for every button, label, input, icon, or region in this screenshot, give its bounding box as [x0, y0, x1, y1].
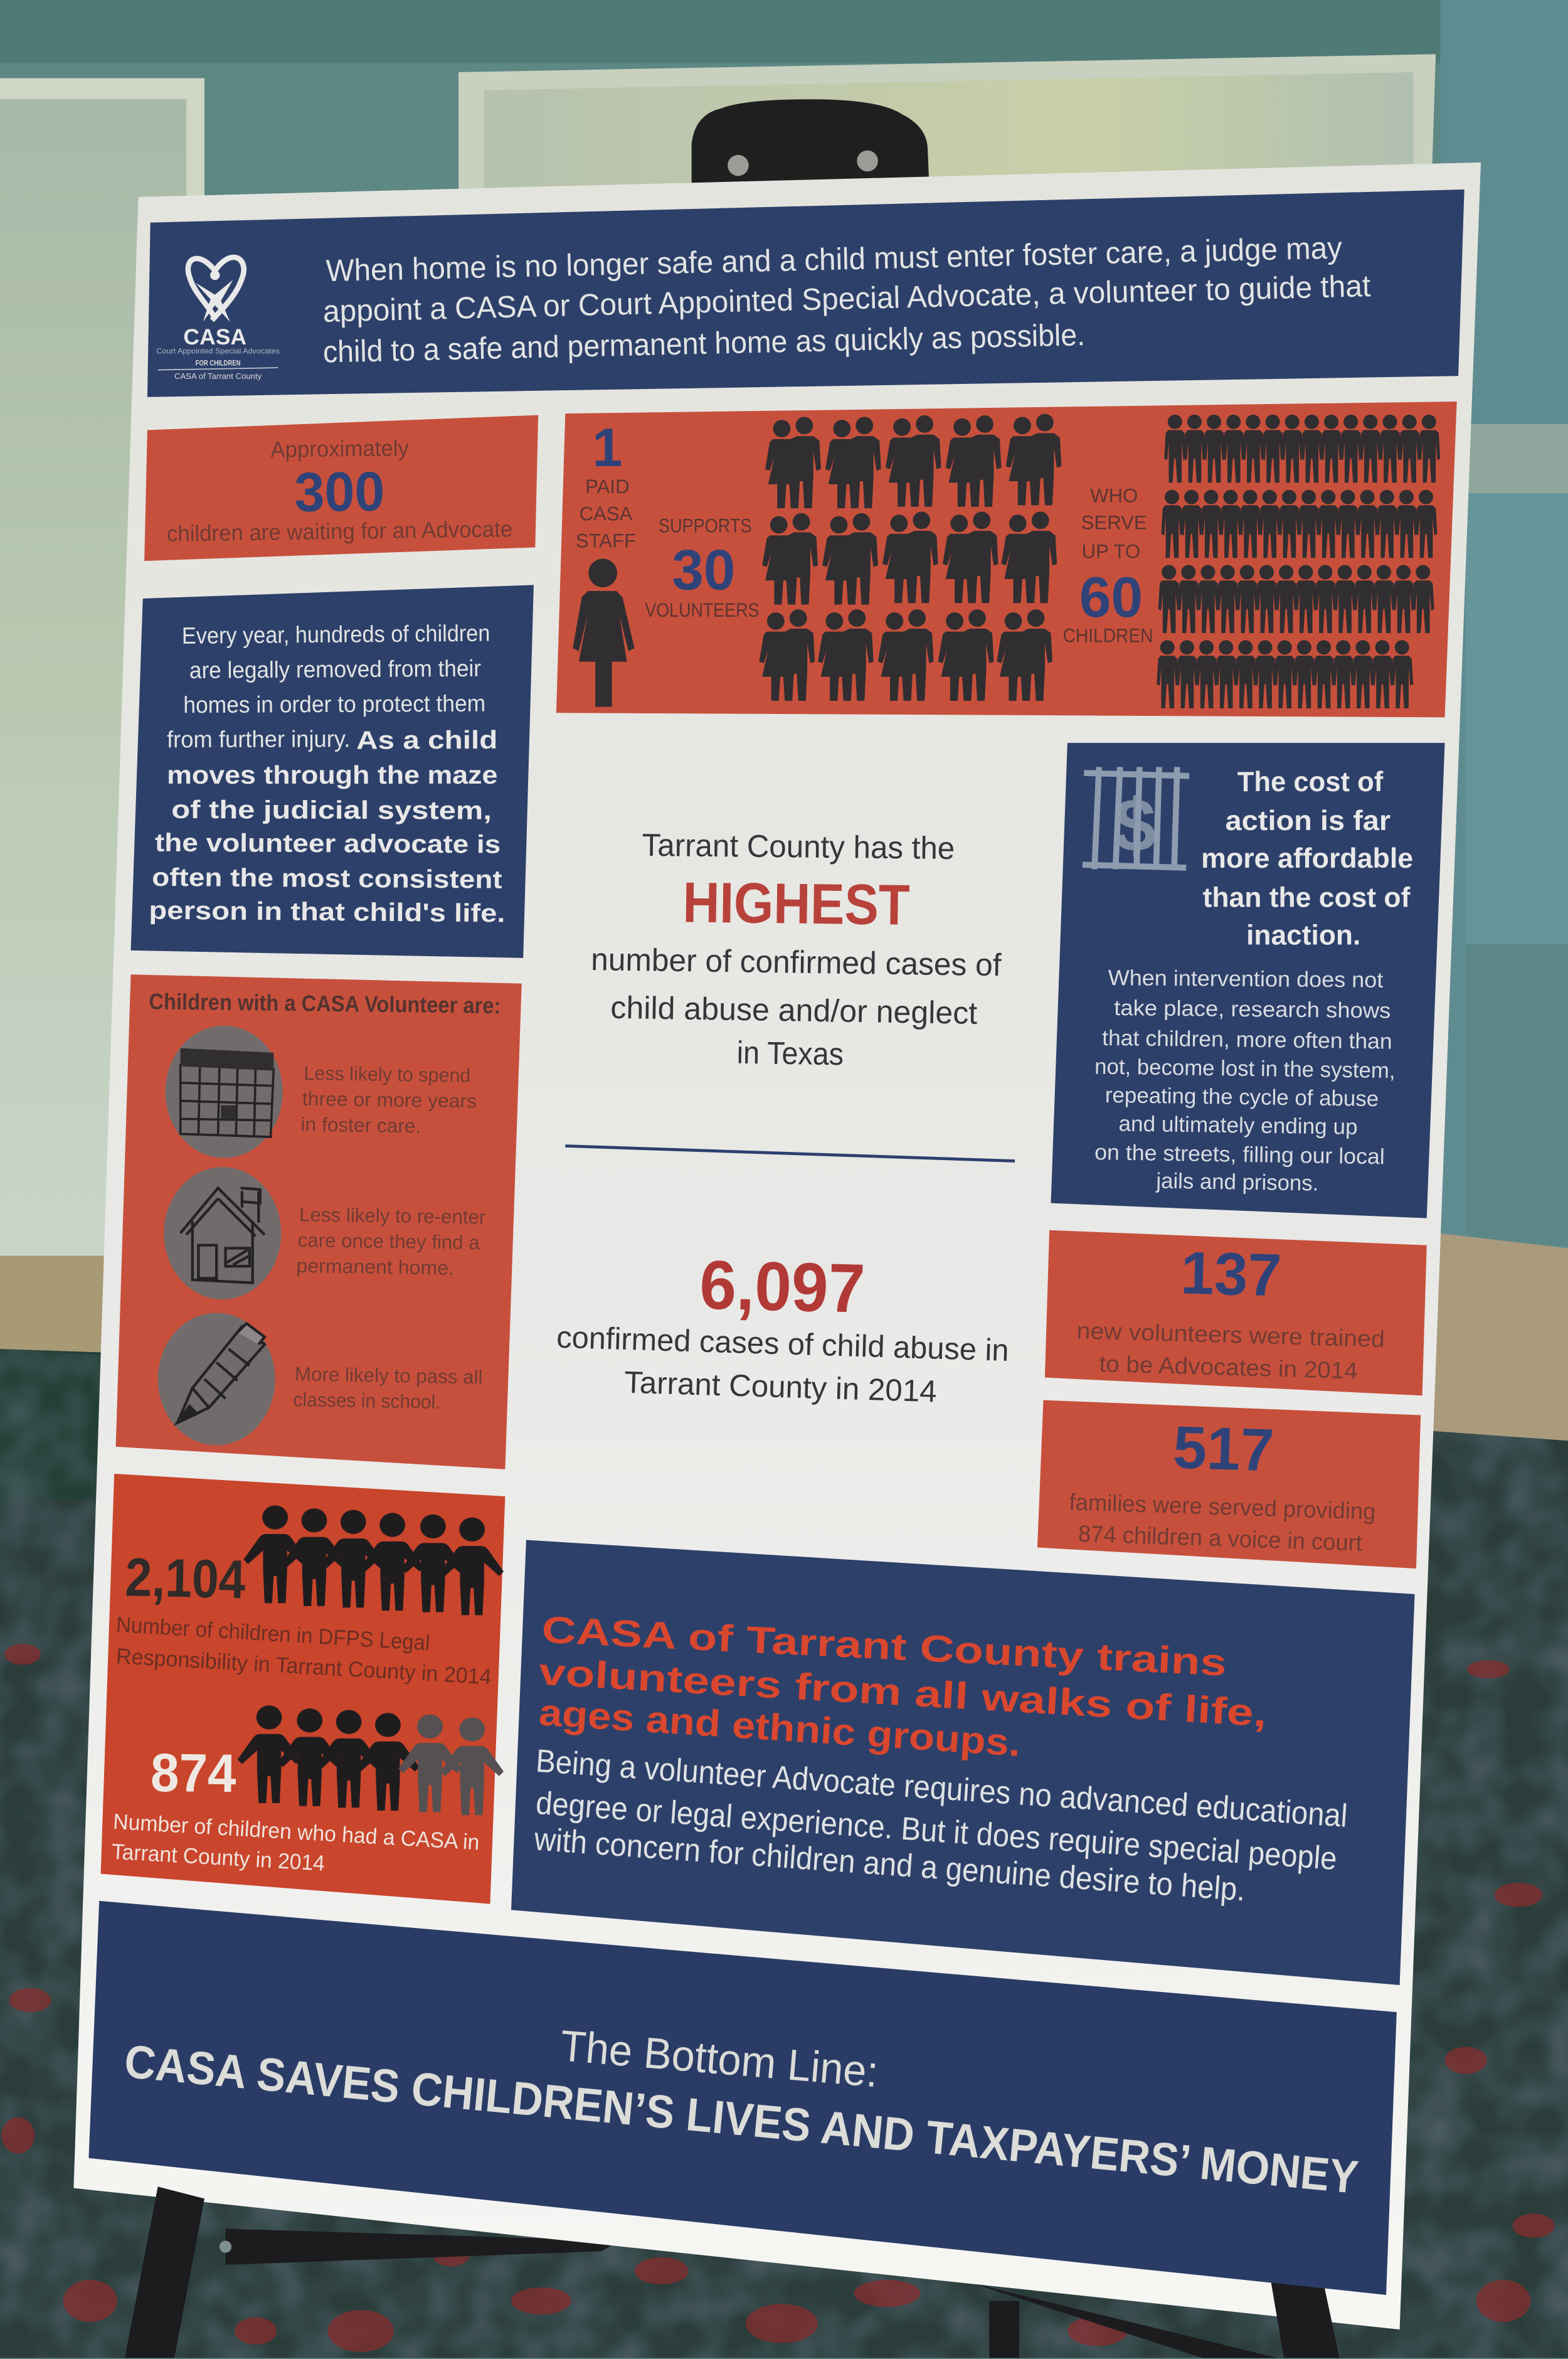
panel: 300 children waiting: children are waiting for an Advocate	[167, 516, 512, 546]
cost body text: that children, more often than	[1102, 1026, 1392, 1054]
text: CASA description: Number of children who had a CASA in	[112, 1810, 480, 1855]
text: CASA description	[111, 1810, 480, 1876]
cost body text: not, become lost in the system,	[1094, 1055, 1396, 1083]
stat: 6,097 confirmed cases	[556, 1246, 1009, 1408]
bottom line text: The Bottom Line:	[558, 2021, 880, 2096]
stat: 1 paid staff: PAID	[585, 476, 630, 498]
handwritten text block: the volunteer advocate is	[155, 828, 501, 859]
plain text block	[167, 620, 490, 752]
headline: highest in Texas: Tarrant County has the	[642, 827, 955, 866]
icon: calendar	[166, 1026, 283, 1158]
text: more likely pass: classes in school.	[293, 1388, 441, 1413]
icons: children	[1157, 415, 1440, 708]
panel: 517 families: families were served providing	[1069, 1489, 1376, 1525]
panel: every year	[131, 585, 534, 958]
icon: dollar behind bars: $	[1114, 784, 1156, 868]
panel: the bottom line	[88, 1901, 1397, 2295]
handwritten heading: CASA of Tarrant County trains	[541, 1609, 1227, 1684]
headline: highest in Texas: child abuse and/or neglect	[610, 989, 978, 1031]
cost body text: and ultimately ending up	[1118, 1112, 1358, 1139]
stat: 6,097 confirmed cases: 6,097	[699, 1246, 866, 1328]
headline: highest in Texas: HIGHEST	[682, 871, 910, 937]
plain text block: are legally removed from their	[189, 655, 481, 683]
cost heading: action is far	[1226, 806, 1391, 836]
bottom line statement: CASA SAVES CHILDREN’S LIVES AND TAXPAYERS’ MONEY	[122, 2035, 1360, 2203]
stat: 60 children: WHO	[1090, 485, 1138, 507]
icon: house	[164, 1167, 281, 1299]
handwritten text block: person in that child's life.	[149, 896, 506, 928]
text: CASA description: Tarrant County in 2014	[111, 1840, 326, 1876]
cost body text: repeating the cycle of abuse	[1105, 1084, 1379, 1111]
stat: 30 volunteers: 30	[672, 539, 735, 602]
panel: 517 families: 874 children a voice in court	[1078, 1520, 1363, 1556]
text: less likely foster: in foster care.	[300, 1114, 421, 1137]
cost heading: than the cost of	[1203, 882, 1411, 913]
stat: 60 children: 60	[1079, 566, 1143, 629]
icon row: four of six children highlighted	[238, 1705, 504, 1815]
logo: CASA: CASA	[183, 326, 246, 349]
handwritten heading: ages and ethnic groups.	[538, 1691, 1022, 1764]
stat: 874: 874	[151, 1743, 236, 1804]
stat: 1 paid staff: STAFF	[576, 530, 636, 552]
text: DFPS description: Responsibility in Tarrant County in 2014	[115, 1644, 492, 1690]
stat: 60 children: UP TO	[1082, 540, 1140, 562]
panel: 137 new volunteers: 137	[1180, 1239, 1282, 1309]
stat: 60 children: SERVE	[1081, 512, 1147, 534]
headline: highest in Texas: number of confirmed cases of	[591, 941, 1002, 982]
handwritten text block: moves through the maze	[167, 760, 497, 789]
panel: 137 new volunteers	[1045, 1230, 1427, 1395]
cost body text	[1094, 966, 1396, 1196]
stat: 1 paid staff: CASA	[580, 503, 633, 525]
panel: intro header	[147, 189, 1465, 397]
plain text block: Every year, hundreds of children	[182, 620, 490, 649]
stat: 60 children: CHILDREN	[1063, 625, 1153, 647]
cost heading: inaction.	[1246, 920, 1360, 951]
stat: 6,097 confirmed cases: confirmed cases of child abuse in	[556, 1321, 1009, 1368]
intro text	[322, 231, 1371, 370]
cost body text: take place, research shows	[1114, 996, 1391, 1023]
stat: 2,104: 2,104	[125, 1547, 246, 1610]
icons: volunteers	[759, 414, 1061, 701]
handwritten text block: often the most consistent	[152, 863, 502, 894]
cost body text: on the streets, filling our local	[1094, 1141, 1385, 1169]
body text: with concern for children and a genuine desire to help.	[532, 1820, 1247, 1908]
panel: 137 new volunteers: new volunteers were trained	[1076, 1317, 1385, 1352]
text: less likely foster	[300, 1062, 477, 1137]
plain text block: homes in order to protect them	[183, 690, 485, 718]
logo: CASA	[156, 257, 280, 381]
cost heading: The cost of	[1237, 767, 1383, 797]
logo: CASA: FOR CHILDREN	[196, 359, 241, 367]
icon: staff person	[573, 558, 635, 707]
panel: CASA trains volunteers	[511, 1540, 1415, 1985]
intro text: When home is no longer safe and a child must enter foster care, a judge may	[326, 231, 1343, 288]
cost body text: jails and prisons.	[1155, 1169, 1319, 1196]
text: more likely pass: More likely to pass all	[295, 1363, 483, 1388]
body text	[532, 1742, 1348, 1908]
easel top clamp	[692, 99, 929, 188]
easel front legs	[125, 2186, 1340, 2358]
stat: 6,097 confirmed cases: Tarrant County in 2014	[623, 1366, 937, 1408]
easel rear braces	[226, 2229, 1278, 2358]
plain text block: from further injury.	[167, 725, 351, 752]
panel: 300 children waiting: 300	[294, 460, 385, 523]
logo: CASA: CASA of Tarrant County	[174, 371, 262, 381]
stat: 30 volunteers	[645, 515, 759, 621]
intro text: appoint a CASA or Court Appointed Special Advocate, a volunteer to guide that	[322, 269, 1371, 329]
stat: 1 paid staff: 1	[592, 418, 622, 478]
cost heading	[1201, 767, 1413, 951]
text: less likely re-enter	[296, 1203, 486, 1279]
panel: 517 families: 517	[1172, 1414, 1275, 1484]
panel: 137 new volunteers: to be Advocates in 2014	[1099, 1350, 1358, 1384]
text: DFPS description	[115, 1613, 492, 1690]
icon: dollar behind bars	[1083, 767, 1189, 869]
handwritten text block	[149, 725, 506, 928]
intro text: child to a safe and permanent home as quickly as possible.	[322, 318, 1086, 370]
handwritten heading	[538, 1609, 1268, 1764]
stat: 30 volunteers: VOLUNTEERS	[645, 599, 759, 621]
panel: children with a CASA volunteer	[116, 974, 522, 1469]
panel: cost of action	[1051, 743, 1445, 1218]
text: DFPS description: Number of children in DFPS Legal	[115, 1613, 430, 1655]
body text: degree or legal experience. But it does require special people	[535, 1784, 1338, 1877]
panel: 300 children waiting: Approximately	[270, 435, 409, 462]
panel: staff to volunteers to children ratio	[556, 402, 1457, 717]
stat: 60 children	[1063, 485, 1153, 647]
handwritten text block: of the judicial system,	[171, 795, 492, 825]
headline: highest in Texas: in Texas	[736, 1035, 844, 1072]
stat: 1 paid staff	[576, 418, 636, 552]
text: less likely foster: three or more years	[302, 1088, 477, 1112]
text: less likely re-enter: care once they find a	[298, 1229, 480, 1254]
handwritten text block: As a child	[356, 725, 497, 755]
text: more likely pass	[293, 1363, 483, 1413]
panel: 517 families	[1037, 1400, 1421, 1568]
cost heading: more affordable	[1201, 843, 1413, 874]
logo: CASA: Court Appointed Special Advocates	[156, 346, 280, 355]
icon row: six children	[243, 1505, 504, 1615]
stat: 30 volunteers: SUPPORTS	[659, 515, 751, 537]
icon: pencil	[158, 1313, 275, 1446]
text: less likely foster: Less likely to spend	[304, 1062, 471, 1087]
panel: DFPS and CASA counts	[101, 1474, 505, 1904]
panel heading: Children with a CASA Volunteer are:	[149, 988, 501, 1018]
handwritten heading: volunteers from all walks of life,	[538, 1651, 1268, 1735]
body text: Being a volunteer Advocate requires no advanced educational	[535, 1742, 1348, 1834]
headline: highest in Texas	[591, 827, 1002, 1072]
panel: 300 children waiting	[144, 415, 538, 561]
cost body text: When intervention does not	[1108, 966, 1384, 993]
text: less likely re-enter: Less likely to re-enter	[299, 1203, 486, 1228]
text: less likely re-enter: permanent home.	[296, 1255, 454, 1279]
